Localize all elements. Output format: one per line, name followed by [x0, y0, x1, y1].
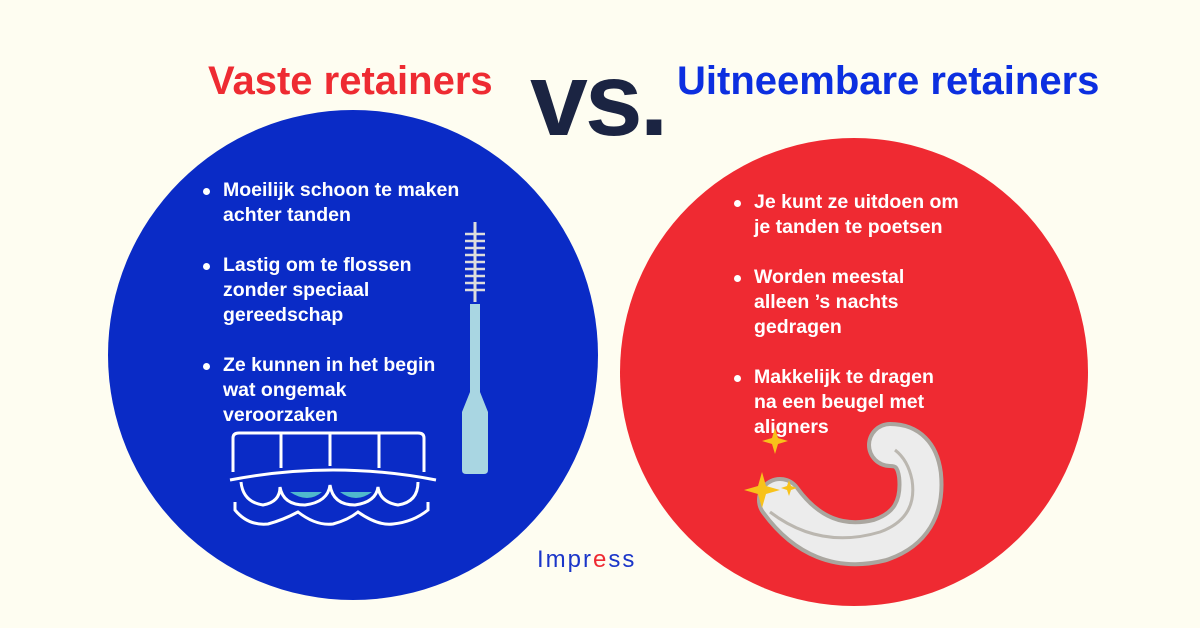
text block: left bullets: achter tanden: [223, 204, 351, 226]
title: left: Vaste retainers: [208, 59, 493, 103]
text block: right bullets: [734, 191, 959, 438]
text block: right bullets: je tanden te poetsen: [754, 216, 943, 238]
icon: clear aligner with sparkles: [744, 422, 944, 566]
text block: right bullets: Makkelijk te dragen: [754, 366, 934, 388]
text block: left bullets: wat ongemak: [223, 379, 347, 401]
panel: red circle: [620, 138, 1088, 606]
text block: left bullets: gereedschap: [223, 304, 343, 326]
text block: left bullets: veroorzaken: [223, 404, 338, 426]
icon: interdental brush: [462, 222, 488, 474]
text block: right bullets: gedragen: [754, 316, 842, 338]
text block: right bullets: na een beugel met: [754, 391, 924, 413]
text block: left bullets: Ze kunnen in het begin: [223, 354, 435, 376]
text block: left bullets: Moeilijk schoon te maken: [223, 179, 459, 201]
text block: left bullets: Lastig om te flossen: [223, 254, 412, 276]
text block: right bullets: Worden meestal: [754, 266, 904, 288]
text block: right bullets: aligners: [754, 416, 829, 438]
text block: right bullets: alleen ’s nachts: [754, 291, 899, 313]
logo: Impress: Impress: [537, 546, 636, 573]
text block: left bullets: zonder speciaal: [223, 279, 369, 301]
title: right: Uitneembare retainers: [677, 59, 1099, 103]
icon: teeth with retainer: [230, 432, 436, 526]
text block: left bullets: [203, 179, 459, 426]
text block: right bullets: Je kunt ze uitdoen om: [754, 191, 959, 213]
vs heading: vs.: [530, 42, 666, 158]
panel: blue circle: [108, 110, 598, 600]
